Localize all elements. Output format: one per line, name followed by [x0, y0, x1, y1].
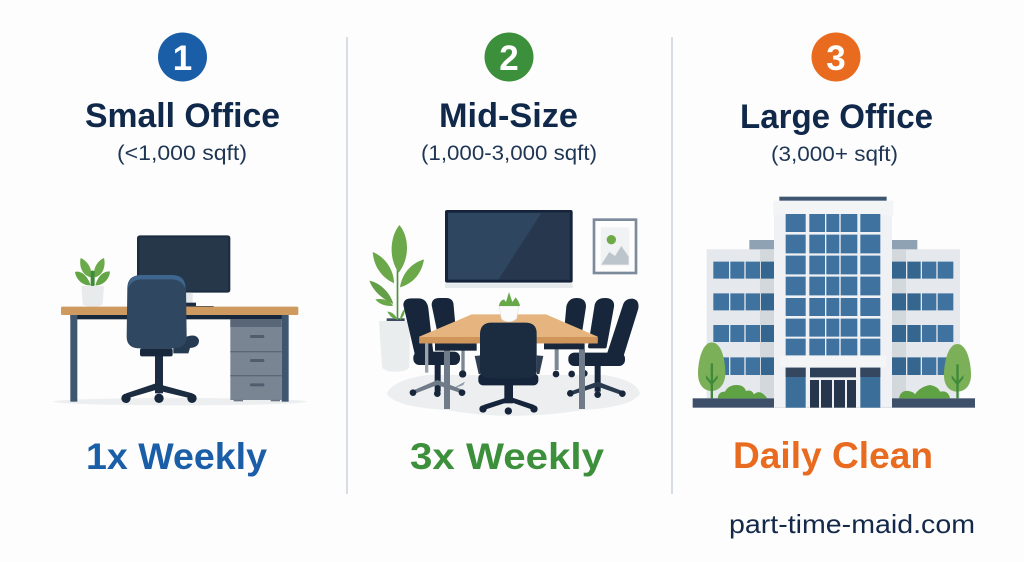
website credit: part-time-maid.com: [729, 509, 975, 539]
foreground chair: [475, 323, 543, 415]
badge 3: [812, 32, 860, 82]
central tower: [773, 197, 893, 408]
side wings: [707, 240, 960, 398]
tabletop plant: [499, 292, 520, 322]
illustration: office building: [693, 197, 975, 408]
table: [419, 314, 598, 409]
desk top and legs: [61, 307, 298, 402]
heading: mid-size: Mid-Size: [439, 97, 578, 135]
icon: monitor: [137, 235, 230, 309]
badge 2: 2: [499, 39, 519, 78]
badge 1: [158, 32, 207, 82]
badge 2: [484, 32, 534, 82]
size range: small office: (<1,000 sqft): [117, 142, 247, 165]
illustration: desk with chair: [53, 235, 307, 405]
panel: large office: [693, 32, 975, 476]
ground strip: [693, 398, 975, 408]
icon: potted plant: [75, 258, 110, 307]
wall screen: [445, 210, 573, 288]
office chair: [121, 275, 199, 403]
panel: small office: [53, 32, 307, 477]
badge 3: 3: [826, 39, 846, 78]
left tree and bushes: [698, 342, 767, 398]
chairs behind right: [553, 300, 637, 398]
drawer cabinet: [230, 319, 282, 401]
frequency: small office: 1x Weekly: [86, 436, 267, 477]
panel: mid-size office: [369, 32, 640, 477]
entrance: [786, 368, 880, 408]
illustration: meeting room: [369, 210, 640, 416]
potted plant: [369, 225, 424, 372]
heading: large office: Large Office: [740, 98, 933, 136]
frequency: large office: Daily Clean: [733, 435, 933, 476]
size range: large office: (3,000+ sqft): [771, 143, 898, 166]
frequency: mid-size: 3x Weekly: [410, 436, 604, 477]
size range: mid-size: (1,000-3,000 sqft): [421, 142, 597, 165]
right tree and bushes: [899, 344, 971, 398]
badge 1: 1: [173, 39, 192, 78]
framed picture: [593, 218, 637, 274]
chairs behind left: [405, 300, 466, 397]
heading: small office: Small Office: [85, 97, 280, 135]
